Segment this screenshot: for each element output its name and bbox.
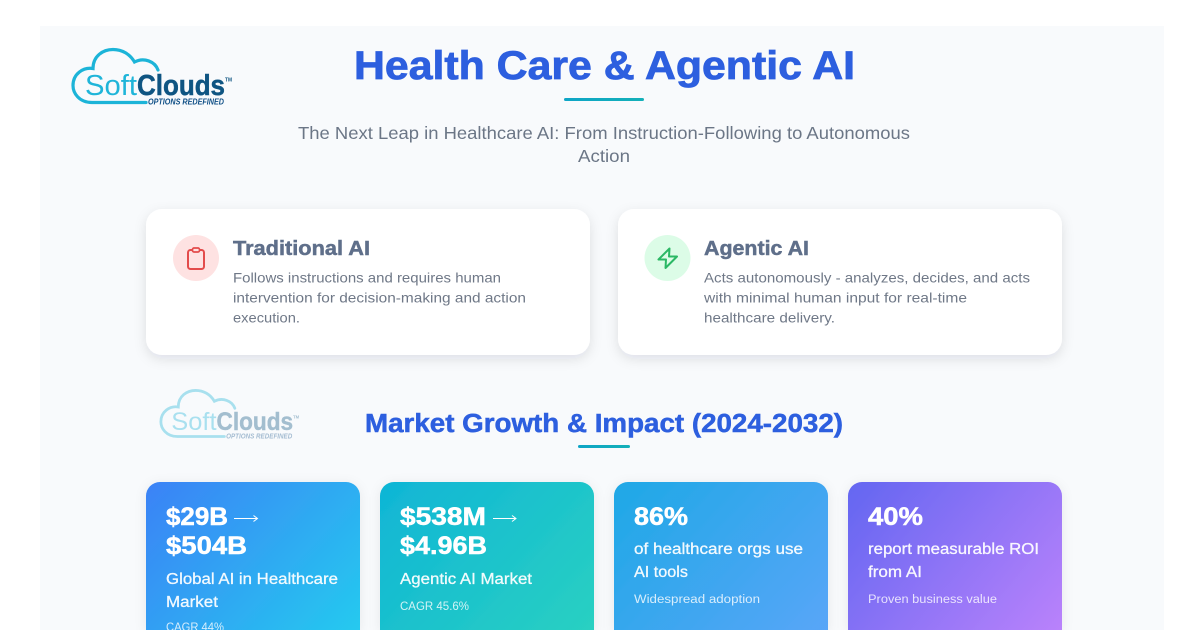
logo: SoftClouds: Clouds	[137, 70, 225, 102]
stat note: Proven business value	[868, 594, 997, 606]
stat card: 40% ROI	[848, 482, 1062, 630]
stat label: from AI	[868, 564, 922, 581]
stat label: AI tools	[634, 564, 688, 581]
stat label: report measurable ROI	[868, 541, 1039, 558]
stat value: 86%: 86%	[634, 503, 688, 531]
stat value: $29B to $504B: $504B	[166, 532, 247, 560]
watermark logo: SoftClouds	[161, 390, 300, 440]
section heading underline	[578, 445, 630, 448]
stat label: of healthcare orgs use	[634, 541, 803, 558]
stat note: Widespread adoption	[634, 594, 760, 606]
panel: Traditional AI	[146, 209, 590, 355]
panel: Agentic AI	[618, 209, 1062, 355]
logo: SoftClouds	[73, 50, 232, 106]
stat value: $538M to $4.96B	[400, 503, 516, 560]
logo: SoftClouds: OPTIONS REDEFINED	[148, 96, 224, 106]
description: Traditional AI	[233, 270, 526, 326]
stat value: $29B to $504B: $29B	[166, 503, 228, 531]
stat value: $538M to $4.96B: $4.96B	[400, 532, 487, 560]
description: Agentic AI: with minimal human input for real-time	[703, 290, 967, 306]
watermark logo: SoftClouds: Clouds	[217, 409, 293, 436]
stat value: $538M to $4.96B: $538M	[400, 503, 486, 531]
title: Health Care & Agentic AI	[354, 44, 855, 88]
stat label	[634, 541, 803, 581]
stat label: Global AI in Healthcare	[166, 571, 338, 588]
description: Traditional AI: intervention for decision-making and action	[233, 290, 526, 306]
stat value: $29B to $504B	[166, 503, 258, 560]
heading: Agentic AI: Agentic AI	[704, 237, 809, 260]
stat label: Agentic AI Market	[400, 571, 533, 588]
description: Traditional AI: execution.	[233, 310, 300, 326]
stat card: Agentic AI market	[380, 482, 594, 630]
icon: lightning bolt	[644, 235, 690, 281]
logo: SoftClouds: TM	[225, 78, 232, 84]
stat label: Market	[166, 594, 219, 611]
watermark logo: SoftClouds: TM	[293, 414, 300, 419]
stat card: Global AI market	[146, 482, 360, 630]
subtitle: The Next Leap in Healthcare AI: From Instruction-Following to Autonomous	[298, 123, 910, 143]
stat value: 40%: 40%	[868, 503, 923, 531]
watermark logo: SoftClouds: OPTIONS REDEFINED	[226, 431, 293, 440]
description: Agentic AI: healthcare delivery.	[704, 310, 835, 326]
heading: Traditional AI: Traditional AI	[233, 237, 370, 260]
description: Traditional AI: Follows instructions and requires human	[233, 270, 501, 286]
watermark logo: SoftClouds: Soft	[171, 409, 217, 436]
description: Agentic AI	[703, 270, 1030, 326]
section heading: market growth: Market Growth & Impact (2024-2032)	[365, 410, 843, 438]
stat label	[166, 571, 338, 611]
stat card: 86% adoption	[614, 482, 828, 630]
logo: SoftClouds: Soft	[85, 70, 137, 102]
stat note: CAGR 45.6%	[400, 601, 469, 613]
description: Agentic AI: Acts autonomously - analyzes, decides, and acts	[704, 270, 1030, 286]
subtitle	[298, 123, 910, 166]
title underline	[564, 98, 644, 101]
stat label	[868, 541, 1039, 581]
icon: clipboard	[173, 235, 219, 281]
subtitle: Action	[578, 146, 630, 166]
